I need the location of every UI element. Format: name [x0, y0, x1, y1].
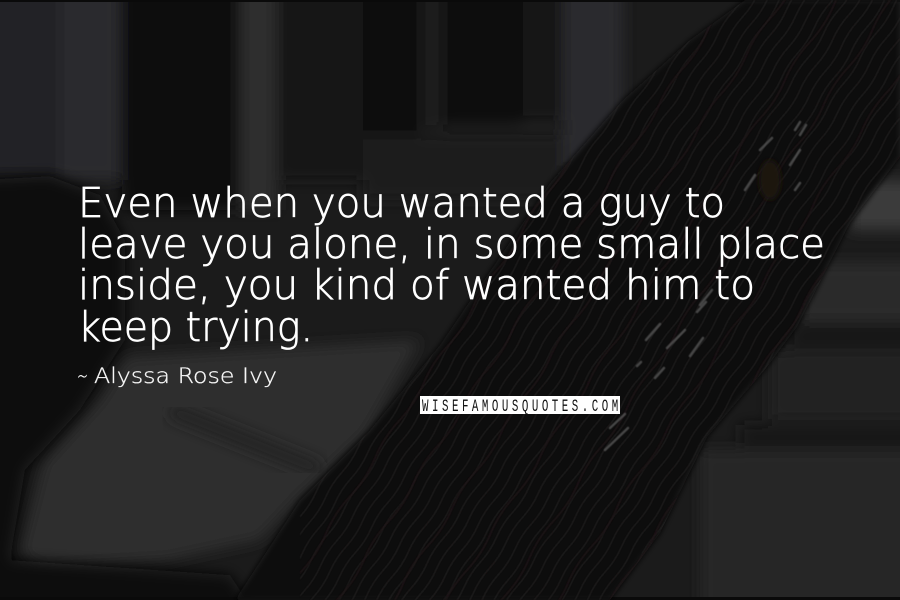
author attribution: Alyssa Rose Ivy: [94, 364, 277, 388]
wicker chair band: [235, 0, 900, 600]
quote text: leave you alone, in some small place: [78, 220, 825, 268]
right side blurred stripes: [700, 180, 900, 600]
left dark chair arm: [0, 176, 260, 600]
brown leaf spot: [759, 160, 781, 200]
author attribution: ~: [77, 364, 88, 388]
watermark badge: WISEFAMOUSQUOTES.COM: [422, 398, 618, 417]
quote text: Even when you wanted a guy to: [78, 179, 725, 227]
quote text: keep trying.: [78, 303, 313, 351]
quote text: inside, you kind of wanted him to: [78, 261, 755, 309]
lower-left light floor shape: [20, 340, 420, 567]
wicker strands: [300, 0, 900, 600]
quote text: [78, 179, 825, 351]
light gaps in the wicker: [605, 122, 806, 450]
